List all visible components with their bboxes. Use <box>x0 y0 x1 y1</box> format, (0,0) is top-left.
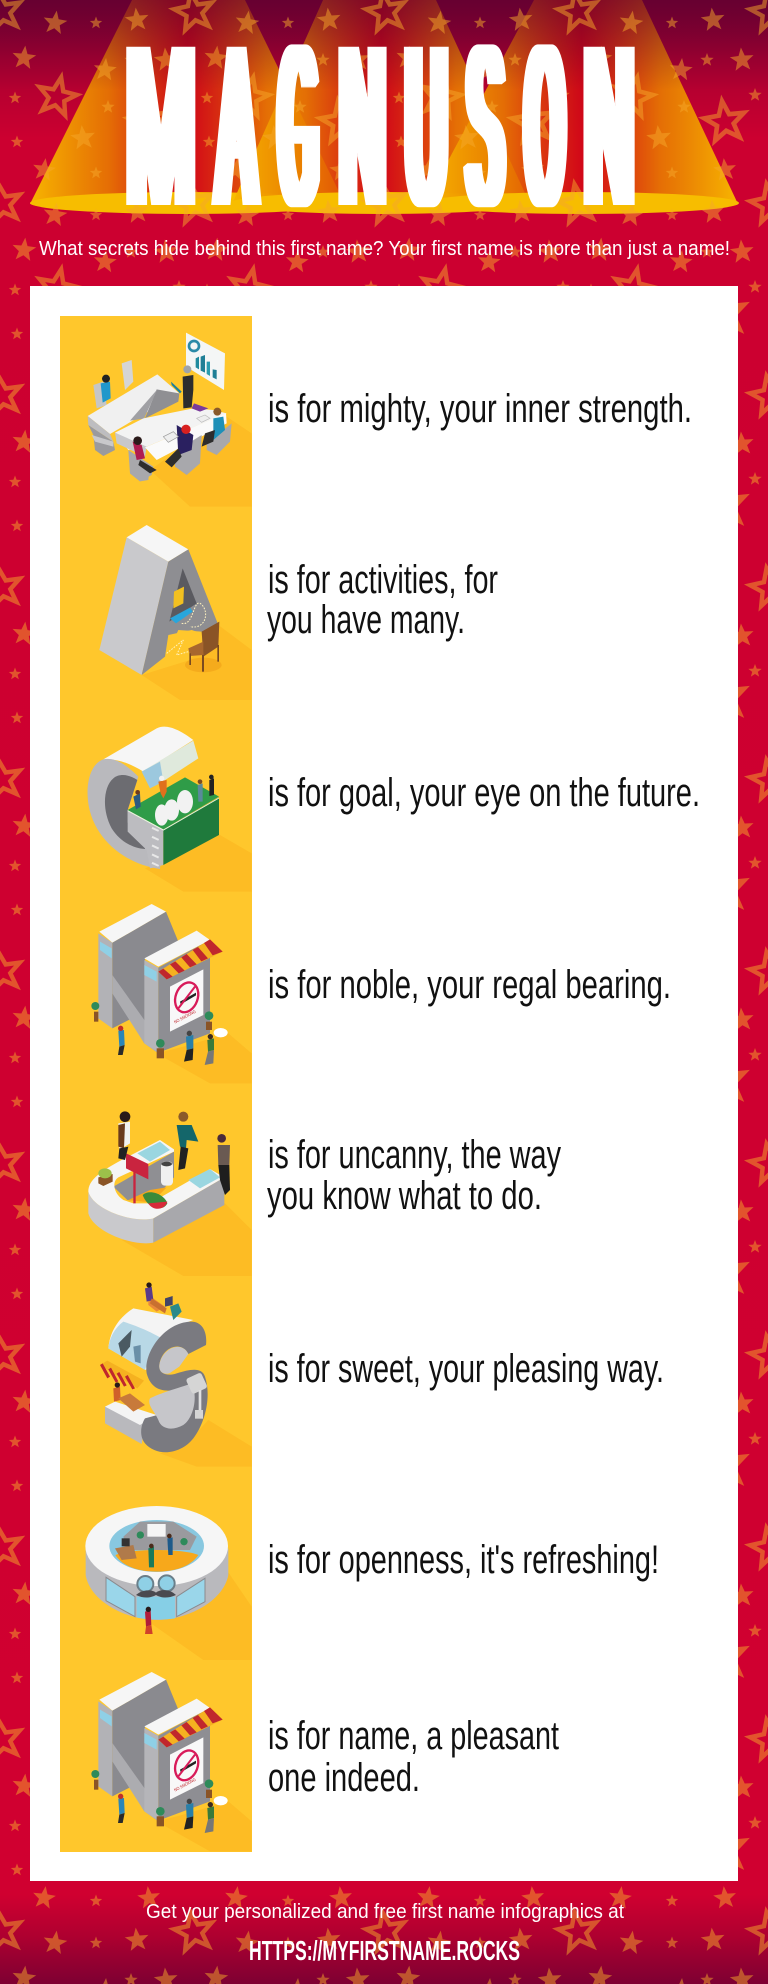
row 2 icon: letter A <box>99 525 252 700</box>
title <box>126 0 633 254</box>
row 8 text: one indeed. <box>268 1756 420 1800</box>
spotlight left <box>30 0 345 214</box>
row 6 icon: letter S office <box>100 1282 252 1467</box>
row text blocks <box>267 387 700 1800</box>
row 3 icon: letter G with green block <box>88 727 252 892</box>
title: O <box>527 0 563 254</box>
spotlights <box>30 0 739 214</box>
yellow illustration column <box>60 316 252 1852</box>
title: G <box>280 0 317 254</box>
row 8 text <box>268 1714 559 1800</box>
row 8 icon: letter N no smoking: NO SMOKING <box>173 1777 197 1793</box>
title: N <box>340 0 385 254</box>
row 2 text <box>267 558 498 642</box>
infographic page: N <box>585 0 633 254</box>
title: S <box>468 0 502 254</box>
row 4 icon: letter N no smoking: NO SMOKING <box>173 1009 197 1025</box>
row 5 icon: letter U food counter <box>88 1111 252 1276</box>
row 2 text: is for activities, for <box>268 558 498 602</box>
title: U <box>407 0 446 254</box>
title: A <box>218 0 255 254</box>
row 8 icon: letter N no smoking <box>91 1672 252 1851</box>
footer url: HTTPS://MYFIRSTNAME.ROCKS <box>249 1935 520 1966</box>
row 4 icon: letter N no smoking <box>91 904 252 1083</box>
row 5 text: is for uncanny, the way <box>268 1133 561 1177</box>
row 1 icon: letter M/N meeting table <box>88 333 252 507</box>
row 5 text <box>267 1133 561 1218</box>
row 2 text: you have many. <box>267 598 465 642</box>
row 5 text: you know what to do. <box>267 1174 542 1218</box>
title: M <box>126 0 195 254</box>
row 7 icon: letter O optician <box>85 1506 252 1660</box>
spotlight middle <box>231 0 531 214</box>
spotlight right <box>425 0 739 214</box>
subtitle: What secrets hide behind this first name? Your first name is more than just a name! <box>39 238 730 260</box>
white content panel <box>30 286 738 1881</box>
footer call to action: Get your personalized and free first name infographics at <box>146 1901 624 1923</box>
row 8 text: is for name, a pleasant <box>268 1714 559 1758</box>
